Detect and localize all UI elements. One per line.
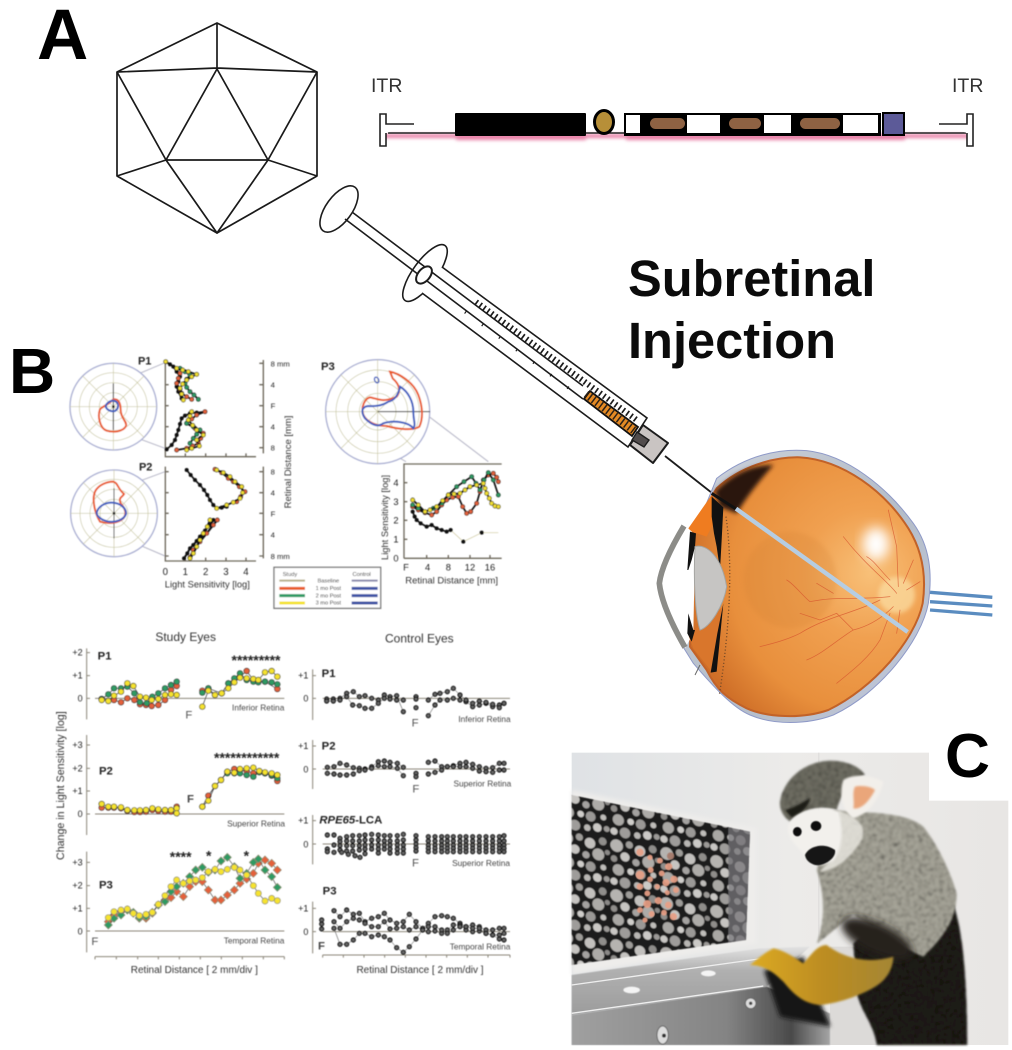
drug section stripes [586,394,636,432]
plunger head [313,180,365,238]
x axis title control: Retinal Distance [ 2 mm/div ] [356,965,484,976]
right axis tick labels [271,359,290,561]
ear [841,776,883,818]
control axes: +1 [298,903,308,913]
metal tray top [572,947,810,1015]
ciliary dotted edge [719,517,730,695]
right axis tick labels: 4 [271,381,276,390]
anterior chamber [658,525,695,648]
labels in study charts: F [91,936,98,948]
labels in study charts: Superior Retina [227,819,285,829]
control axes: 0 [303,927,308,937]
labels in control charts: Temporal Retina [450,941,511,951]
labels in study charts: P1 [98,650,112,662]
study axes: +1 [72,903,83,913]
vitreous shade [743,532,837,628]
control axes: 0 [303,764,308,774]
legend: 3 mo Post [316,601,341,607]
chart P3 sensitivity profile: 4 [425,563,430,573]
yellow arm and hand [750,945,893,1005]
hub inner [632,432,649,447]
label P2: P2 [139,462,152,474]
control axes: 0 [303,839,308,849]
chart P3 sensitivity profile: 16 [485,563,495,573]
polar plot P1 [70,363,157,450]
labels in control charts: F [412,858,419,870]
right axis tick labels: 4 [271,531,276,540]
heading Study Eyes: Study Eyes [155,630,216,644]
optic disc [878,577,915,613]
labels in control charts: Inferior Retina [458,714,511,724]
eyes [793,821,821,836]
panel label B: B [9,335,55,407]
axis title: light sensitivity: Light Sensitivity [log] [165,579,250,589]
barrel [422,267,647,447]
y axis title: Change in Light Sensitivity [log] [55,711,67,860]
brow mark [785,798,810,817]
control series RPE65-LCA [327,834,504,857]
right ITR hairpin [939,114,973,146]
optic nerve [930,592,992,615]
orange drug section [584,391,638,436]
icosahedron capsid diagram [117,23,317,233]
chart P3 sensitivity profile [380,464,502,587]
label: right ITR: ITR [952,75,983,97]
chart P3 sensitivity profile: 1 [393,535,399,545]
monkey [750,761,967,1045]
chart P3 sensitivity profile: 3 [393,497,399,507]
right axis tick labels: 8 [271,444,275,453]
right axis tick labels: F [271,509,276,518]
right axis tick labels: 8 mm [271,552,290,561]
study axes [72,648,284,959]
needle in eye [712,493,737,509]
x axis numbers: 1 [183,567,188,578]
scatter P2 lower [184,520,217,558]
study series P1 [102,671,277,707]
promoter black box [455,113,586,136]
labels in study charts: P3 [99,879,113,891]
legend [274,567,381,608]
backbone line [388,132,966,134]
labels in study charts: F [187,793,194,805]
chart P3 sensitivity profile: 2 [393,516,399,526]
panel C: monkey photograph [572,722,1011,1045]
x axis numbers: 4 [243,567,249,578]
labels in study charts: Inferior Retina [232,703,285,713]
black pigment band [687,497,723,673]
x axis numbers: 3 [223,567,229,578]
label P3: P3 [321,361,335,373]
barrel flange [395,238,455,308]
labels in control charts: RPE65-LCA [319,814,382,826]
labels in study charts [91,650,285,948]
panel B: perimetry and sensitivity profiles [70,355,502,608]
legend: Control [353,572,371,578]
lower tick marks [465,312,582,398]
labels in study charts: P2 [99,765,113,777]
chart P3 sensitivity profile: Retinal Distance [mm] [405,576,498,587]
labels in control charts: P2 [322,741,336,753]
control series P1 [327,688,504,716]
retina [690,457,924,716]
study axes: +3 [72,740,83,750]
labels in control charts: F [318,941,325,953]
sclera [684,450,930,722]
axes for P1 and P2 scatter [165,360,263,561]
study axes: +3 [72,857,83,867]
chart P3 sensitivity profile: F [403,563,409,573]
pink target dots [636,849,679,923]
label P1: P1 [138,355,151,367]
panel label C: C [945,722,990,791]
study axes: 0 [78,809,83,819]
polar plot P3 [326,360,430,464]
finger ring on rod [413,263,435,287]
labels in control charts: P1 [322,668,336,680]
screws [623,970,756,1044]
significance stars: ************ [214,750,280,766]
control axes [298,669,510,958]
title: Subretinal Injection: Injection [628,312,836,369]
left ITR hairpin [380,114,414,146]
labels in control charts: P3 [323,886,337,898]
metal tray front [572,987,830,1045]
pink shadow under construct [384,136,970,138]
chart P3 sensitivity profile: 12 [465,563,475,573]
control axes: +1 [298,671,308,681]
labels in control charts: F [412,717,419,729]
head cap [780,761,865,822]
labels in control charts: Superior Retina [453,779,512,789]
labels in study charts: Temporal Retina [224,935,285,945]
right axis tick labels: 4 [271,423,276,432]
study axes: +1 [72,671,83,681]
syringe [313,180,712,493]
graduation ticks [476,302,638,421]
face [788,808,842,865]
heading Control Eyes: Control Eyes [385,631,454,645]
needle hub [630,425,668,463]
significance stars [170,652,281,864]
significance stars: * [206,848,212,864]
scatter P1 upper [166,362,227,406]
right axis tick labels: F [271,402,276,411]
muzzle [805,846,835,865]
control axes: +1 [298,741,308,751]
study axes: +2 [72,648,83,658]
polar plot P2 [71,470,157,557]
study axes: 0 [78,926,83,936]
scatter P2 upper [187,469,245,513]
iris upper orange [688,495,717,537]
chart P3 sensitivity profile: Light Sensitivity [log] [380,475,390,560]
labels in study charts: F [185,709,192,721]
control series P3 [322,910,504,952]
labels in control charts: F [412,783,419,795]
chart P3 sensitivity profile: 0 [393,554,399,564]
right axis tick labels: 8 mm [271,359,290,368]
wall background [572,753,1008,1045]
polyA blue square [883,113,904,135]
significance stars: * [244,848,250,864]
dark shoulder patch [836,909,918,968]
study axes: +2 [72,881,83,891]
study series P3 [96,857,277,925]
cornea [659,526,685,647]
chart P3 sensitivity profile: 8 [446,563,451,573]
dark pigment top [715,465,773,513]
retinal vessels [760,510,920,683]
title: Subretinal Injection: Subretinal [628,250,875,307]
scatter P1 lower [167,412,205,450]
display screen with dots [572,795,750,965]
AAV vector genome map [371,75,983,146]
corner shade [818,753,893,1045]
neck fringe [820,810,863,872]
dark lower body [853,903,967,1045]
plunger rod [345,212,583,399]
gray upper body [817,810,957,957]
oval element [594,110,614,134]
study series P2 [102,768,277,824]
legend: Baseline [317,579,339,585]
inner ear [853,786,875,809]
legend: Study [283,572,297,578]
chart P3 sensitivity profile: 4 [393,478,399,488]
tray highlight [572,958,763,1013]
significance stars: ********* [232,652,281,668]
right axis tick labels: 4 [271,489,276,498]
right axis tick labels: 8 [271,468,275,477]
x axis numbers [163,567,249,578]
legend: 2 mo Post [316,593,341,599]
study axes: 0 [78,694,83,704]
eyeball cross-section [658,450,992,722]
control axes: +1 [298,816,308,826]
labels in control charts [318,668,512,953]
light delivery tube [736,509,908,632]
needle [665,456,712,493]
control series P2 [327,761,504,777]
control axes: 0 [303,694,308,704]
dark shadow under arm [764,957,831,1027]
study axes: +2 [72,763,83,773]
bright reflection [863,527,889,561]
study axes: +1 [72,786,83,796]
display frame [572,790,757,975]
limbal tick [695,665,700,675]
labels in control charts: Superior Retina [452,858,510,868]
coding region [624,113,881,136]
legend: 1 mo Post [316,586,341,592]
title: Subretinal Injection [628,250,875,369]
label: left ITR: ITR [371,75,402,97]
leader lines [120,363,488,556]
axis title: retinal distance: Retinal Distance [mm] [283,416,294,508]
iris lower orange [688,607,723,672]
panel B lower: change in light sensitivity charts [55,630,512,976]
x axis title study: Retinal Distance [ 2 mm/div ] [131,965,258,976]
x axis numbers: 0 [163,567,168,578]
white corner notch [929,730,1011,801]
lens [694,546,727,630]
significance stars: **** [170,848,192,864]
x axis numbers: 2 [203,567,208,578]
